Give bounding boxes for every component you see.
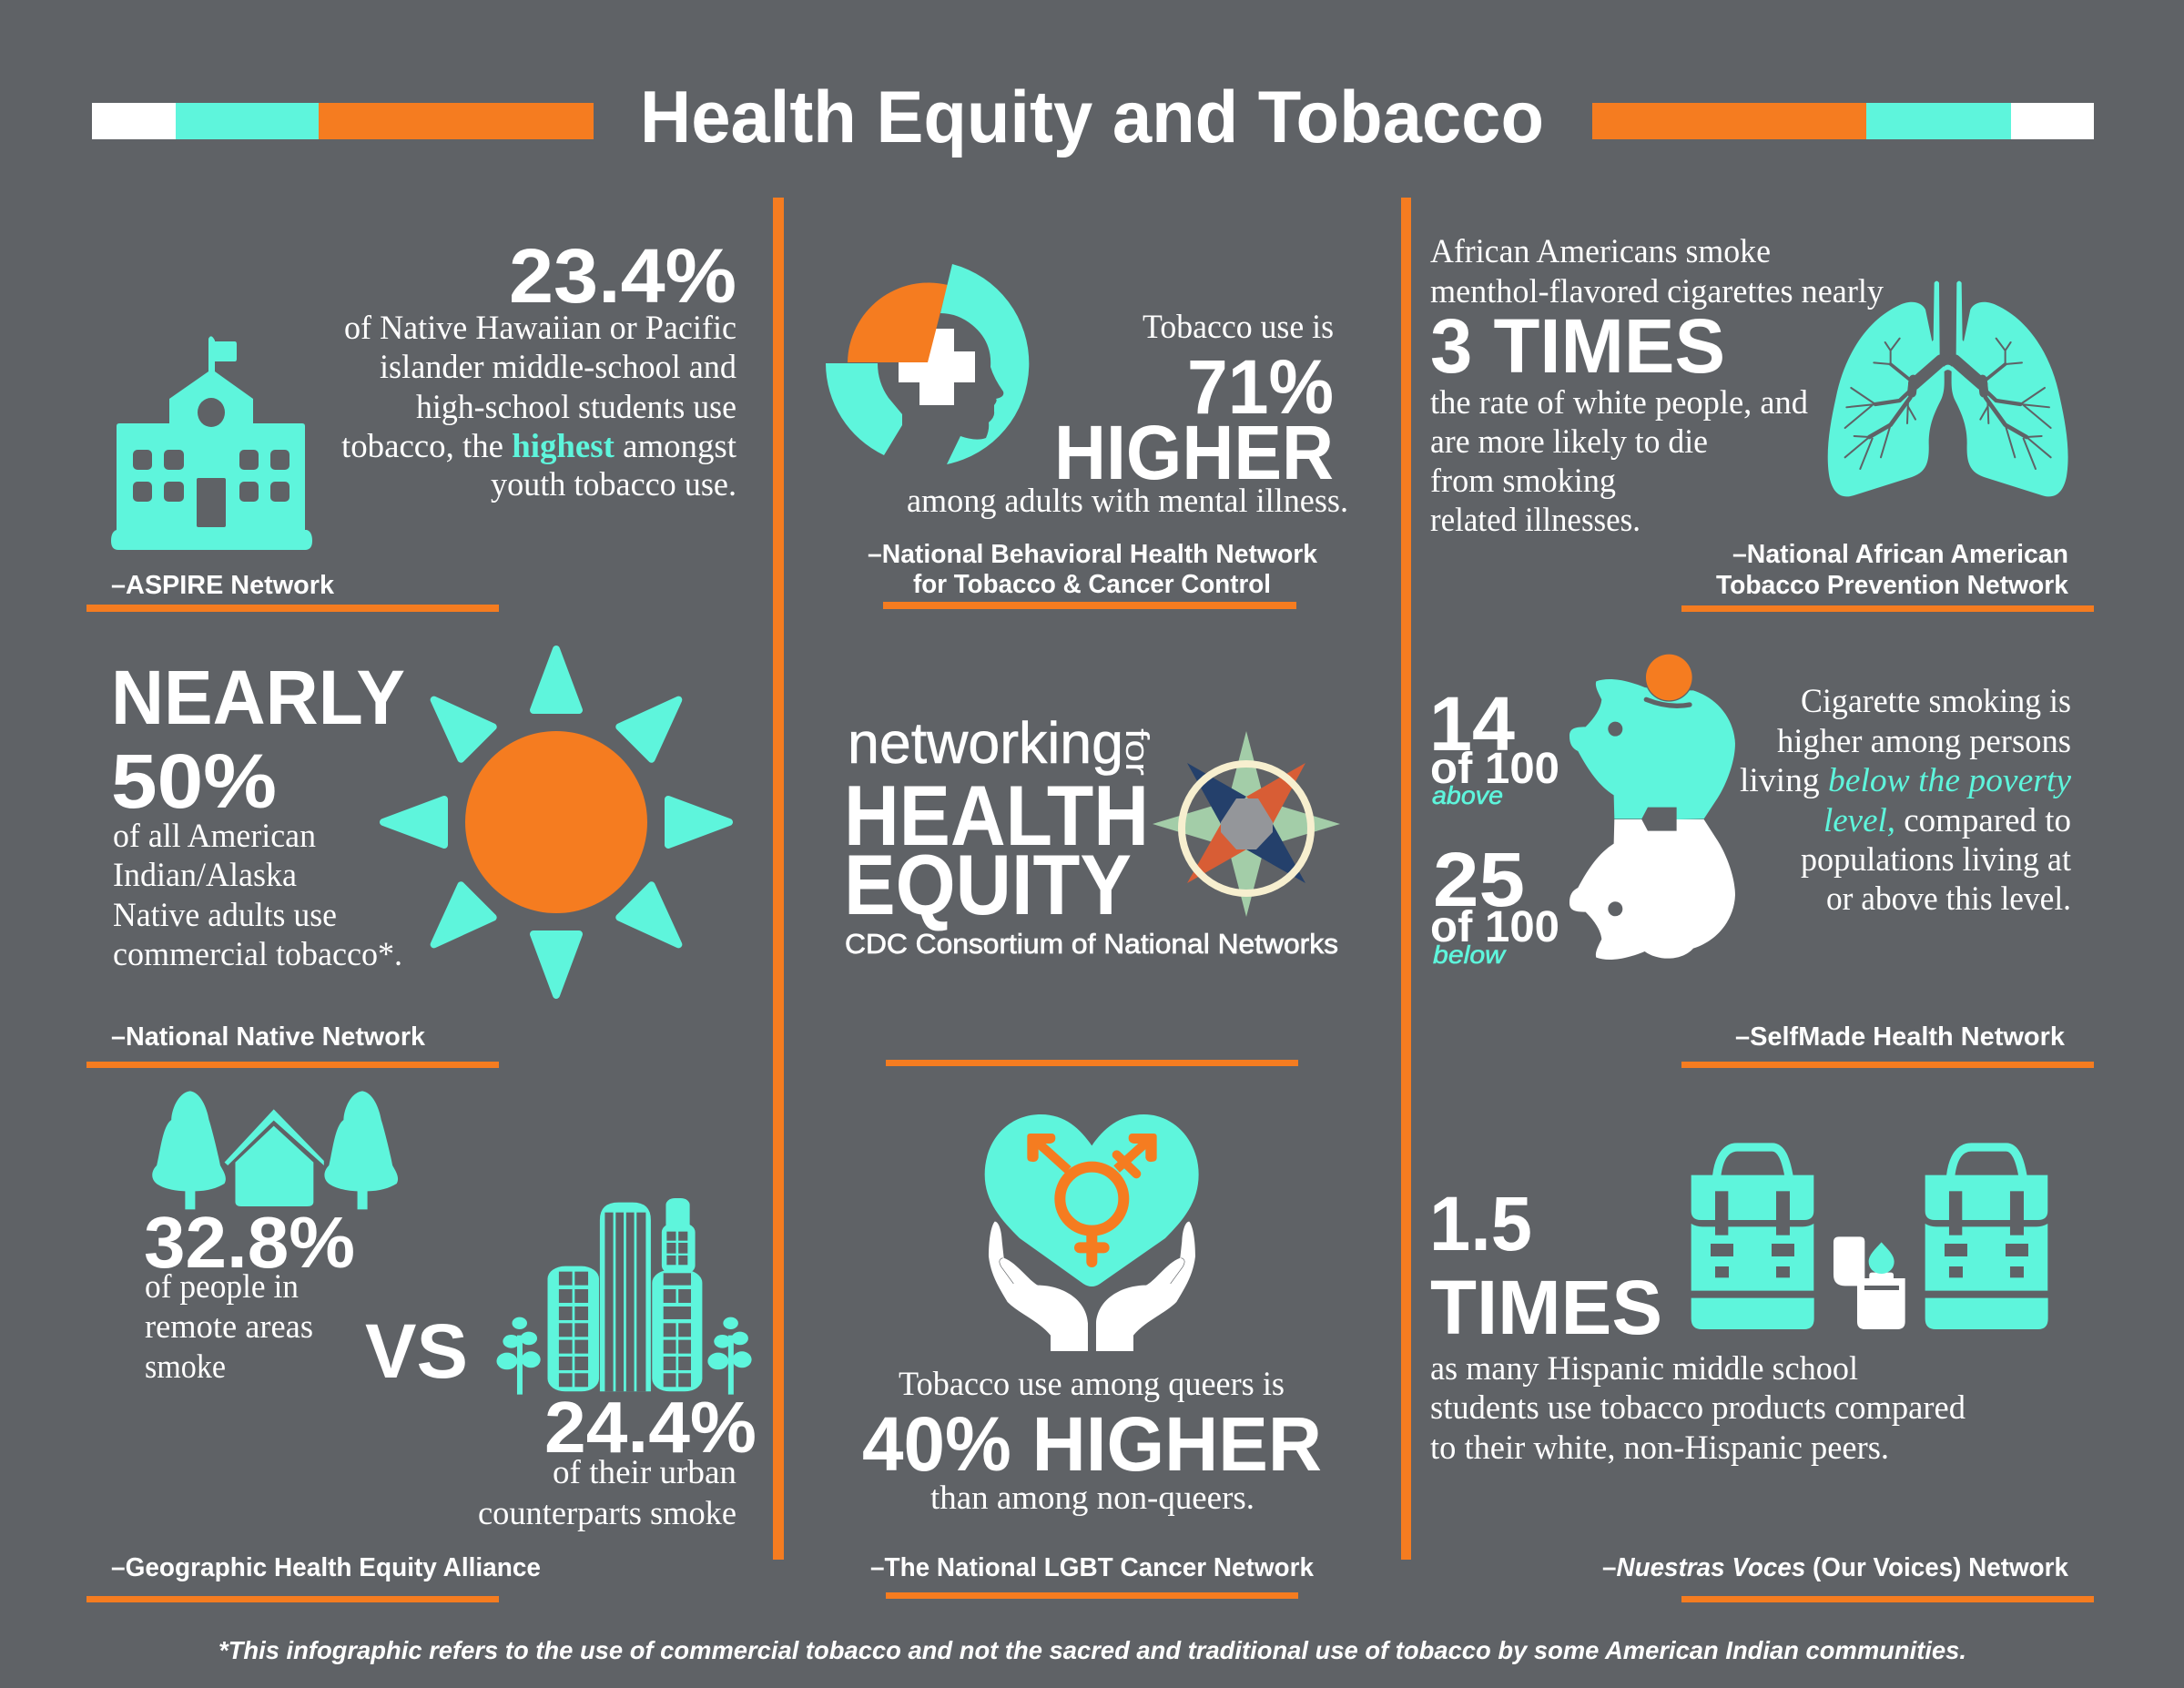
text block: high-school students use: [416, 389, 736, 426]
attribution: –The National LGBT Cancer Network: [870, 1553, 1315, 1582]
text block: students use tobacco products compared: [1430, 1389, 1966, 1427]
text block: intro: menthol-flavored cigarettes nearly: [1430, 273, 1884, 310]
statistic: above poverty level: of 100: [1430, 745, 1559, 793]
statistic: urban: 24.4%: [544, 1387, 757, 1468]
attribution: –National Behavioral Health Network: [868, 540, 1318, 569]
text block: [1740, 683, 2072, 918]
statistic: below poverty level: [1430, 837, 1559, 969]
logo wordmark: HEALTH: [844, 768, 1149, 863]
attribution: [1716, 540, 2069, 600]
text block: outro: are more likely to die: [1430, 423, 1708, 461]
logo wordmark: [844, 710, 1338, 960]
statistic: above poverty level: [1429, 681, 1559, 809]
text block: Cigarette smoking is: [1801, 683, 2071, 720]
text block: outro: the rate of white people, and: [1430, 384, 1808, 422]
text: outro: than among non-queers.: [930, 1480, 1255, 1517]
attribution: for Tobacco & Cancer Control: [913, 570, 1271, 599]
statistic: below poverty level: of 100: [1430, 903, 1559, 951]
text block: urban: of their urban: [553, 1454, 736, 1491]
text block: intro: [1430, 233, 1884, 310]
logo wordmark: networking: [848, 710, 1123, 776]
footnote: *This infographic refers to the use of commercial tobacco and not the sacred and traditional use of tobacco by some American Indian communities.: [218, 1636, 1966, 1664]
text: intro: Tobacco use is: [1143, 309, 1334, 346]
attribution: –National Native Network: [111, 1022, 426, 1052]
text: outro: among adults with mental illness.: [907, 483, 1348, 520]
icon: backpacks and lighter: [1691, 1147, 2048, 1329]
heading: TIMES: [1430, 1265, 1662, 1350]
text block: living below the poverty: [1740, 762, 2072, 799]
heading: NEARLY: [111, 655, 405, 740]
statistic: 71%: [1187, 344, 1334, 430]
text block: commercial tobacco*.: [113, 936, 402, 973]
panel: Geographic Health Equity Alliance: [111, 1091, 757, 1582]
icon: sun: [383, 649, 729, 995]
text block: urban: counterparts smoke: [478, 1495, 736, 1532]
text block: higher among persons: [1777, 723, 2071, 760]
panel: Networking for Health Equity logo: [844, 710, 1340, 960]
icon: compass rose: [1153, 731, 1340, 917]
text block: Indian/Alaska: [113, 857, 297, 894]
text block: tobacco, the highest amongst: [341, 428, 737, 465]
panel: ASPIRE Network: [111, 233, 737, 600]
attribution: –SelfMade Health Network: [1735, 1022, 2066, 1052]
text block: remote: [145, 1268, 313, 1386]
icon: heart with symbol and hands: [985, 1114, 1199, 1351]
statistic: 3 TIMES: [1430, 303, 1725, 389]
text block: intro: African Americans smoke: [1430, 233, 1771, 270]
versus label: VS: [365, 1308, 468, 1394]
panel: National Native Network: [111, 649, 729, 1052]
text: intro: Tobacco use among queers is: [899, 1366, 1285, 1403]
text block: urban: [478, 1454, 736, 1532]
text block: of all American: [113, 818, 316, 855]
text block: outro: [1430, 384, 1808, 539]
attribution: Tobacco Prevention Network: [1716, 571, 2069, 600]
statistic: remote: 32.8%: [144, 1202, 355, 1283]
attribution: [868, 540, 1318, 599]
text block: as many Hispanic middle school: [1430, 1350, 1858, 1388]
statistic: 23.4%: [509, 233, 736, 319]
panel: National Behavioral Health Network: [826, 264, 1348, 599]
attribution: –National African American: [1732, 540, 2068, 569]
text block: outro: related illnesses.: [1430, 502, 1641, 539]
text block: or above this level.: [1826, 880, 2071, 918]
statistic: below poverty level: 25: [1433, 837, 1525, 922]
heading: HIGHER: [1054, 410, 1334, 495]
icon: city skyline: [496, 1198, 752, 1395]
text block: to their white, non-Hispanic peers.: [1430, 1429, 1889, 1467]
title banner: [92, 76, 2094, 158]
text block: islander middle-school and: [380, 349, 736, 386]
panel: National African American Tobacco Prevention Network: [1430, 233, 2069, 600]
attribution: –Geographic Health Equity Alliance: [111, 1553, 541, 1582]
title: Health Equity and Tobacco: [640, 76, 1544, 158]
icon: piggy banks and coin: [1569, 653, 1735, 960]
text block: Native adults use: [113, 897, 337, 934]
text block: remote: remote areas: [145, 1308, 313, 1346]
icon: lungs: [1828, 281, 2068, 496]
attribution: –ASPIRE Network: [111, 571, 335, 600]
icon: head with medical cross: [826, 264, 1029, 464]
text block: [1430, 1350, 1966, 1467]
text block: remote: smoke: [145, 1348, 226, 1386]
statistic: 40% HIGHER: [862, 1401, 1322, 1487]
statistic: above poverty level: 14: [1429, 681, 1515, 767]
text block: [341, 310, 737, 503]
text block: populations living at: [1801, 841, 2072, 879]
text block: [113, 818, 402, 973]
panel: Nuestras Voces Network: [1429, 1147, 2069, 1582]
text block: youth tobacco use.: [491, 466, 736, 503]
text block: remote: of people in: [145, 1268, 299, 1306]
statistic: 50%: [111, 738, 277, 824]
logo wordmark: CDC Consortium of National Networks: [845, 928, 1338, 960]
attribution: –Nuestras Voces (Our Voices) Network: [1602, 1553, 2069, 1582]
statistic: 1.5: [1429, 1181, 1532, 1266]
icon: school: [111, 336, 312, 550]
logo wordmark: for: [1119, 728, 1156, 776]
icon: trees and house: [152, 1091, 398, 1209]
logo wordmark: EQUITY: [844, 837, 1132, 932]
statistic: above poverty level: above: [1432, 781, 1503, 809]
statistic: below poverty level: below: [1433, 941, 1507, 969]
text block: of Native Hawaiian or Pacific: [344, 310, 736, 347]
panel: SelfMade Health Network: [1429, 653, 2072, 1052]
text block: level, compared to: [1823, 802, 2071, 839]
text block: outro: from smoking: [1430, 463, 1616, 500]
panel: National LGBT Cancer Network: [862, 1114, 1322, 1582]
